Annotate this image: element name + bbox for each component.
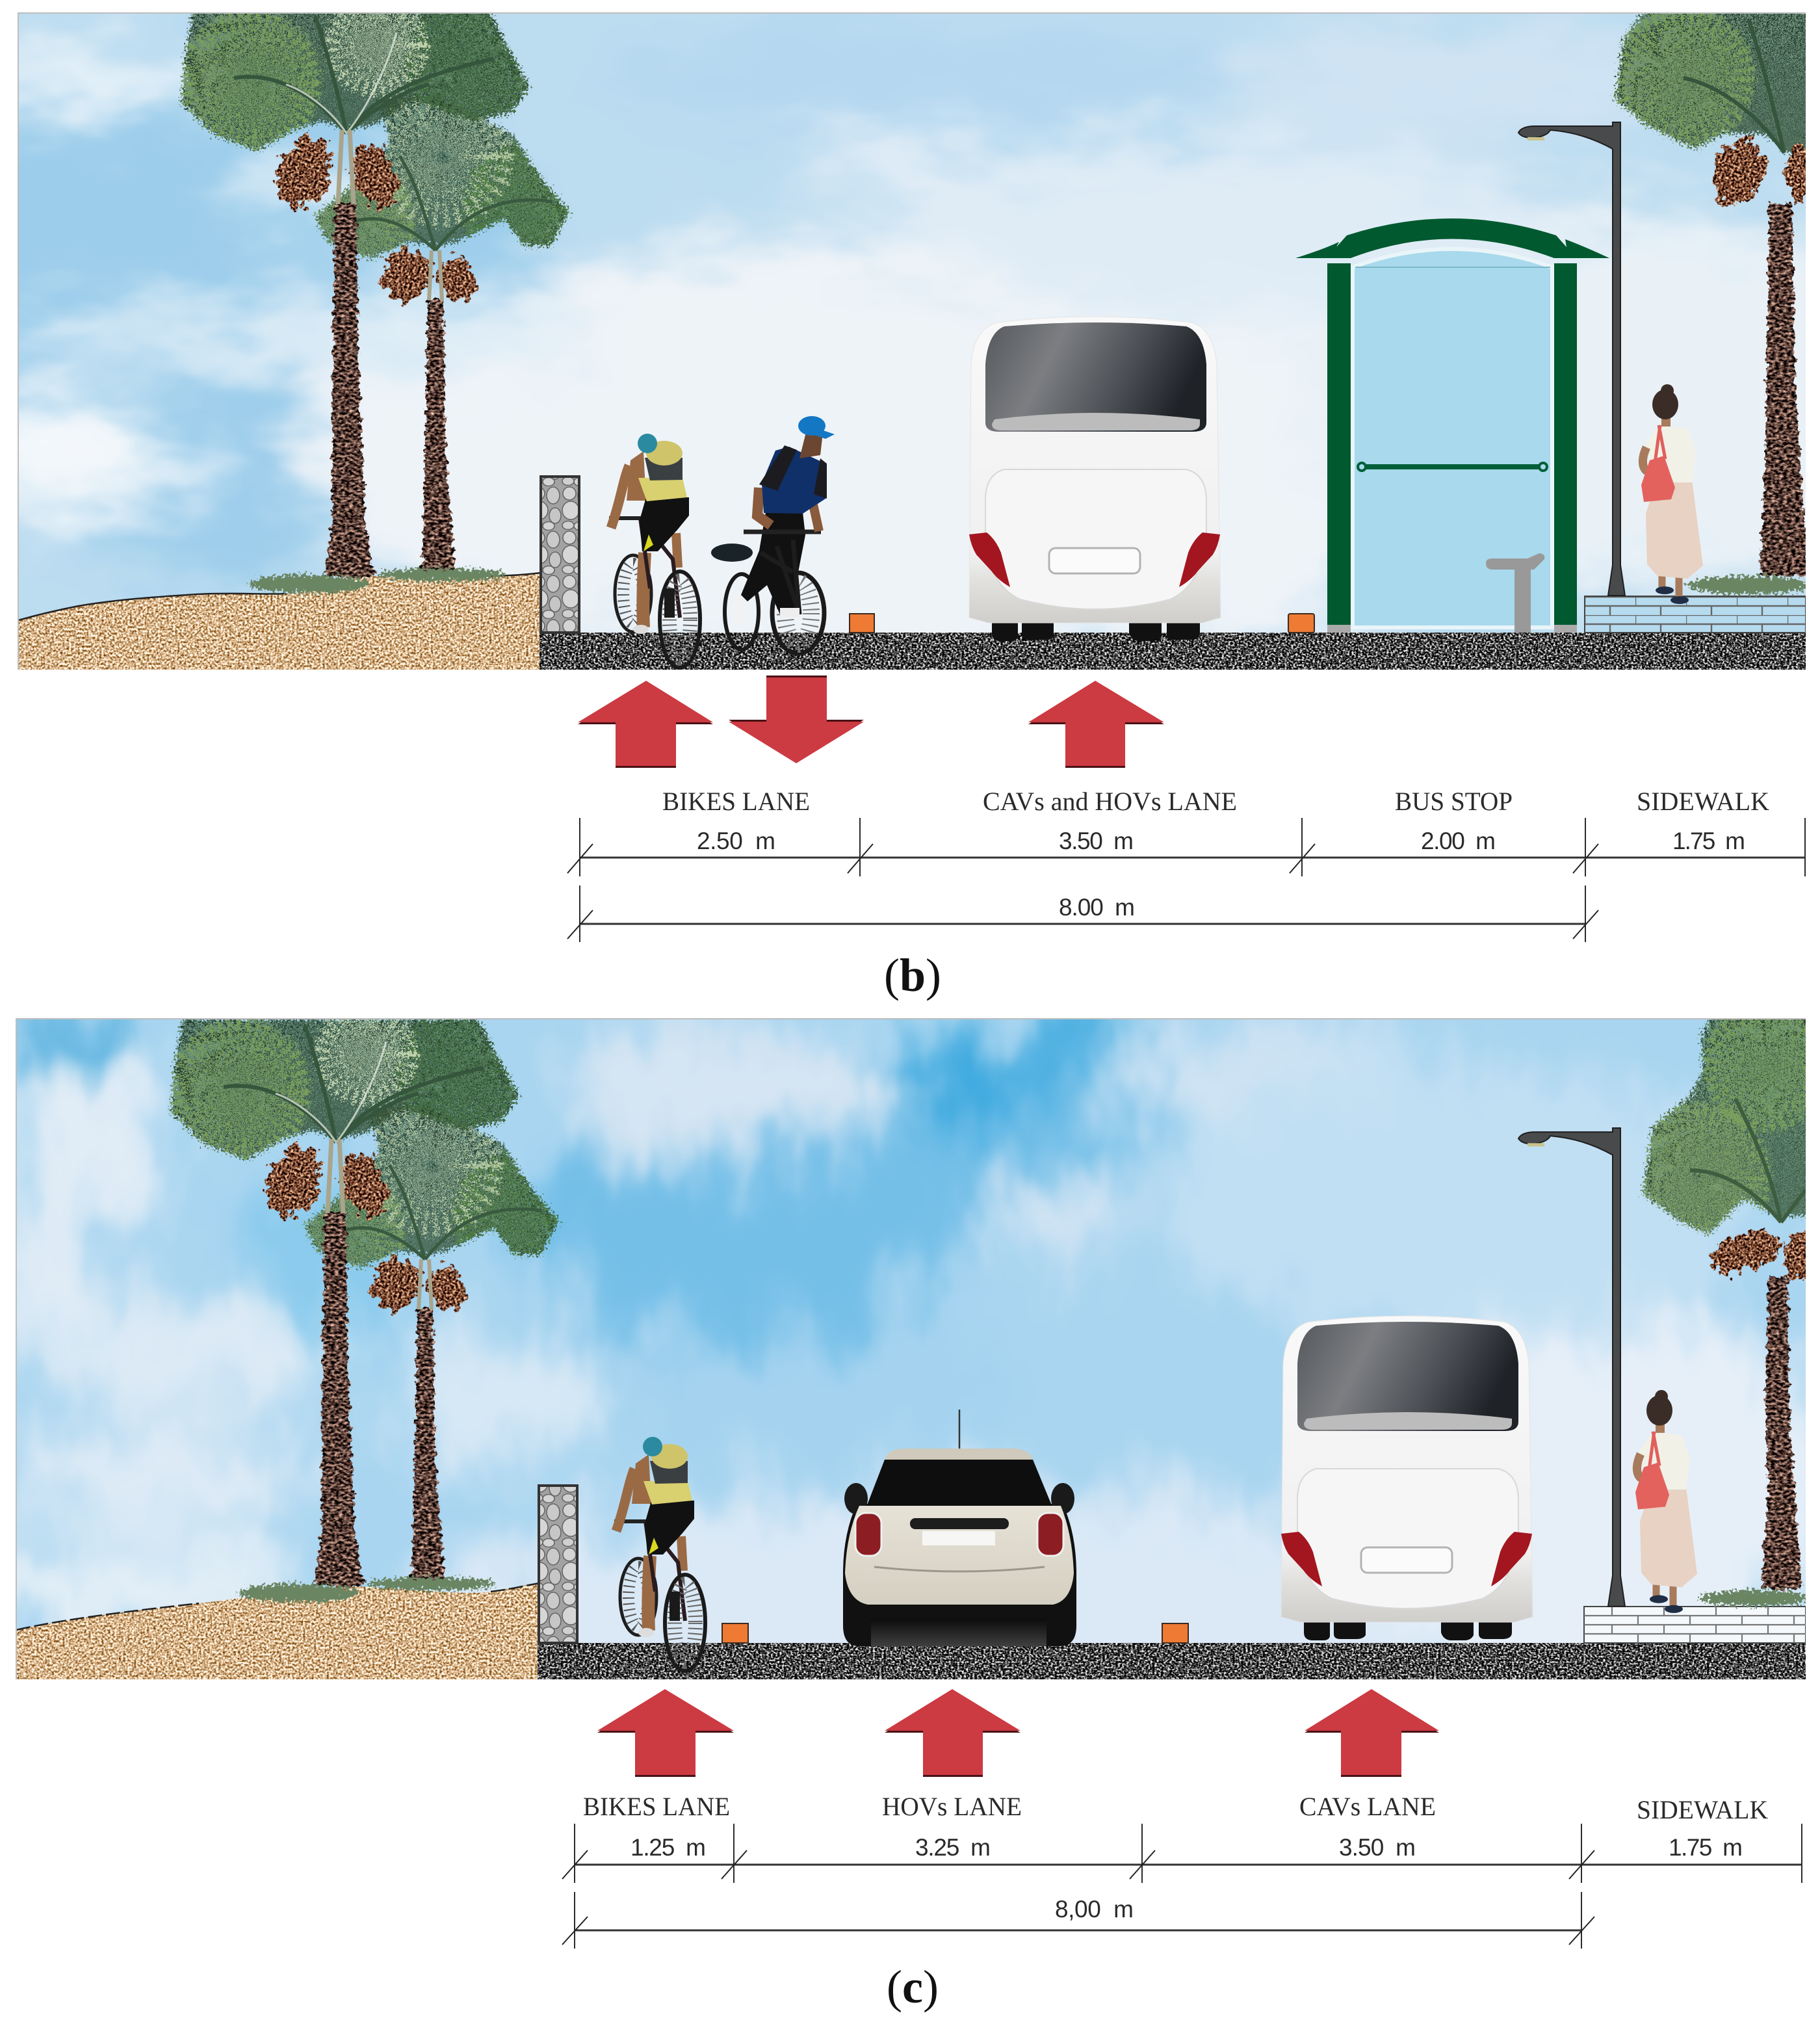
arrow: CAV and HOV lane up [1028, 681, 1164, 766]
label: bus stop: BUS STOP [1395, 787, 1513, 816]
icon: bus [969, 317, 1221, 641]
value: 3.50 m c: 3.50 m [1339, 1834, 1416, 1861]
value: 3.25 m: 3.25 m [915, 1834, 991, 1861]
icon: bus c [1281, 1316, 1533, 1640]
icon: orange lane separator 2 [1288, 614, 1314, 633]
arrow: bike lane up [578, 681, 713, 766]
icon: cyclist c [614, 1437, 705, 1671]
panel b frame [18, 13, 1806, 670]
caption: (b): (b) [884, 949, 941, 1001]
icon: palm trees left c [165, 1019, 568, 1602]
icon: palm trees left [176, 10, 578, 593]
icon: sidewalk kerb [1585, 596, 1806, 633]
value: 8.00 m: 8.00 m [1059, 894, 1135, 921]
icon: stone wall [541, 477, 579, 633]
icon: pedestrian c [1635, 1390, 1697, 1613]
sky b clouds [19, 14, 1806, 633]
hill outline c [16, 1583, 540, 1630]
icon: cyclist with blue cap [711, 416, 835, 653]
icon: lamp post c [1518, 1128, 1625, 1607]
icon: pedestrian b [1641, 384, 1703, 604]
label: CAVs and HOVs lane: CAVs and HOVs LANE [983, 787, 1237, 816]
arrows: panel b directions [578, 676, 1164, 768]
arrow: CAV lane [1305, 1689, 1439, 1775]
label: CAVs lane: CAVs LANE [1299, 1792, 1436, 1821]
icon: stone wall c [539, 1486, 577, 1643]
icon: bus shelter [1295, 218, 1609, 633]
brick courses c [1584, 1607, 1806, 1643]
dimension block: panel b [567, 787, 1805, 942]
value: 2.50 m: 2.50 m [697, 828, 775, 854]
ground: sand hill [18, 573, 541, 670]
arrow: bikes lane c [597, 1689, 734, 1775]
label: sidewalk c: SIDEWALK [1637, 1795, 1768, 1824]
icon: orange separator c2 [1162, 1623, 1188, 1643]
value: 1.75 m c: 1.75 m [1669, 1834, 1743, 1861]
value: 3.50 m b: 3.50 m [1059, 828, 1134, 854]
caption: (c): (c) [887, 1961, 939, 2013]
label: bikes lane b: BIKES LANE [662, 787, 810, 816]
icon: orange lane separator 1 [850, 614, 874, 633]
arrow: bike lane down [729, 677, 864, 763]
panel: cross section c scene [0, 889, 1820, 1809]
panel: cross section b scene [19, 14, 1806, 670]
label: HOVs lane: HOVs LANE [882, 1792, 1022, 1821]
arrows: panel c directions [597, 1689, 1439, 1777]
label: bikes lane c: BIKES LANE [583, 1792, 730, 1821]
icon: palm right c [1632, 1014, 1820, 1606]
ground: sand hill c [16, 1583, 540, 1679]
sky c clouds [0, 889, 1820, 1809]
bricks c [1584, 1607, 1806, 1643]
icon: car [843, 1410, 1076, 1646]
icon: cyclist with backpack [609, 434, 700, 668]
icon: palm right [1606, 10, 1820, 594]
icon: orange separator c1 [722, 1623, 748, 1643]
icon: lamp post b [1518, 122, 1625, 596]
road surface c [538, 1643, 1806, 1679]
hill outline [18, 573, 541, 620]
road surface [540, 633, 1806, 670]
dimension block: panel c [562, 1792, 1802, 1949]
value: 1.25 m: 1.25 m [630, 1834, 706, 1861]
icon: sidewalk kerb c [1584, 1607, 1806, 1643]
arrow: HOV lane [885, 1689, 1020, 1775]
label: sidewalk b: SIDEWALK [1637, 787, 1769, 816]
value: 1.75 m b: 1.75 m [1672, 828, 1745, 854]
bricks b [1585, 596, 1806, 633]
panel c frame [16, 1019, 1806, 1679]
value: 8,00 m: 8,00 m [1055, 1896, 1134, 1923]
value: 2.00 m: 2.00 m [1421, 828, 1496, 854]
